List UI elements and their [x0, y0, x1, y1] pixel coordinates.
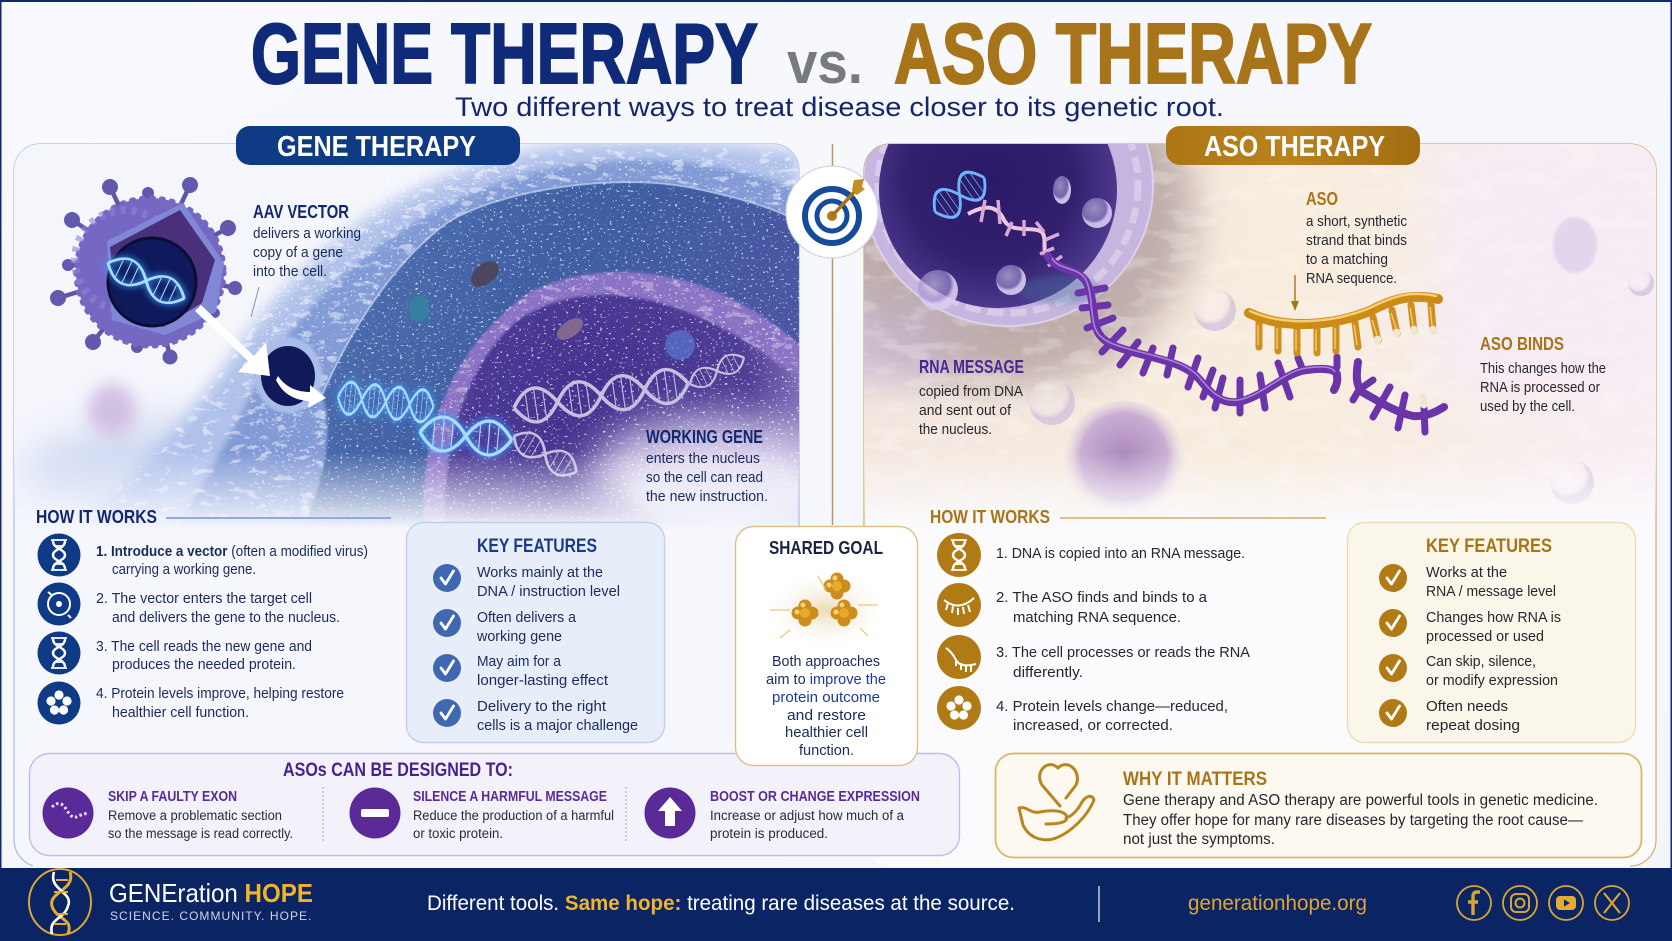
- skip a faulty exon: SKIP A FAULTY EXON: [108, 789, 237, 805]
- boost or change expression: protein is produced.: [710, 826, 828, 841]
- step 2: matching RNA sequence.: [1013, 610, 1181, 626]
- social icons: [1457, 886, 1629, 920]
- label: AAV vector: into the cell.: [253, 264, 327, 280]
- key features: gene: DNA / instruction level: [477, 584, 620, 600]
- key features: gene: May aim for a: [477, 654, 562, 670]
- step 4: healthier cell function.: [112, 705, 249, 721]
- step 3: 3. The cell reads the new gene and: [96, 639, 312, 655]
- step 1: [937, 533, 1245, 577]
- panel: ASOs can be designed to: [30, 754, 960, 856]
- silence a harmful message: Reduce the production of a harmful: [413, 808, 614, 823]
- key features: ASO: repeat dosing: [1426, 718, 1520, 734]
- skip a faulty exon: Remove a problematic section: [108, 808, 282, 823]
- boost or change expression: BOOST OR CHANGE EXPRESSION: [710, 789, 920, 805]
- brand name: GENEration HOPE: [109, 878, 313, 908]
- key features: ASO: RNA / message level: [1426, 584, 1556, 600]
- icon: target: [786, 166, 878, 258]
- label: AAV vector: AAV VECTOR: [253, 202, 349, 222]
- shared goal: healthier cell: [785, 725, 868, 741]
- heading pill: gene therapy: GENE THERAPY: [277, 131, 476, 163]
- step 2: [38, 582, 340, 626]
- why it matters: They offer hope for many rare diseases by targeting the root cause—: [1123, 812, 1583, 829]
- label: working gene: so the cell can read: [646, 470, 763, 486]
- DNA in nucleus: [932, 170, 986, 219]
- label: ASO: a short, synthetic: [1306, 214, 1407, 230]
- key features: gene: working gene: [476, 629, 562, 645]
- label: RNA message: copied from DNA: [919, 384, 1023, 400]
- title: GENE THERAPY: [251, 7, 758, 102]
- key features: ASO: KEY FEATURES: [1426, 536, 1552, 557]
- label: ASO binds: RNA is processed or: [1480, 380, 1600, 396]
- key features: gene: [406, 522, 664, 742]
- step 2: and delivers the gene to the nucleus.: [112, 610, 340, 626]
- silence a harmful message: [350, 788, 614, 841]
- step 2: [937, 583, 1208, 627]
- key features: gene: Works mainly at the: [477, 565, 603, 581]
- label: ASO: ASO: [1306, 189, 1338, 209]
- title: [251, 7, 1372, 102]
- step 2: 2. The ASO finds and binds to a: [996, 590, 1208, 606]
- heading pill: gene therapy: [236, 126, 520, 165]
- step 1: 1. Introduce a vector (often a modified virus): [96, 544, 368, 560]
- shared goal: [736, 526, 918, 766]
- why it matters: WHY IT MATTERS: [1123, 769, 1267, 790]
- step 3: produces the needed protein.: [112, 657, 296, 673]
- gene therapy illustration: [14, 141, 840, 540]
- skip a faulty exon: [42, 788, 293, 841]
- why it matters: [996, 754, 1642, 858]
- website: generationhope.org: [1188, 892, 1367, 915]
- icon: heart in hand: [1019, 765, 1094, 840]
- panel: ASOs can be designed to: ASOs CAN BE DESIGNED TO:: [283, 760, 513, 781]
- label: ASO binds: ASO BINDS: [1480, 334, 1564, 354]
- panel: gene therapy: [14, 141, 840, 866]
- thin pointer: [251, 287, 259, 317]
- label: ASO: to a matching: [1306, 252, 1388, 268]
- step 1: 1. DNA is copied into an RNA message.: [996, 546, 1245, 562]
- label: ASO binds: This changes how the: [1480, 361, 1606, 377]
- how it works: gene: HOW IT WORKS: [36, 507, 157, 527]
- cell entry hole: [254, 337, 322, 413]
- DNA strands: [336, 349, 748, 482]
- label: RNA message: [919, 357, 1024, 438]
- title: ASO THERAPY: [894, 7, 1372, 102]
- key features: gene: Delivery to the right: [477, 699, 606, 715]
- step 3: [937, 635, 1250, 681]
- shared goal: and restore: [787, 708, 866, 724]
- step 4: 4. Protein levels improve, helping restore: [96, 686, 344, 702]
- subtitle: Two different ways to treat disease closer to its genetic root.: [455, 92, 1224, 122]
- label: ASO: strand that binds: [1306, 233, 1407, 249]
- why it matters: Gene therapy and ASO therapy are powerful tools in genetic medicine.: [1123, 792, 1598, 809]
- skip a faulty exon: so the message is read correctly.: [108, 826, 293, 841]
- why it matters: not just the symptoms.: [1123, 831, 1275, 848]
- how it works: gene: [36, 507, 391, 724]
- nucleus: [864, 144, 1154, 327]
- boost or change expression: [644, 788, 920, 841]
- ASO illustration: [864, 144, 1656, 524]
- boost or change expression: Increase or adjust how much of a: [710, 808, 904, 823]
- label: RNA message: RNA MESSAGE: [919, 357, 1024, 377]
- center divider: [832, 144, 834, 525]
- label: ASO binds: used by the cell.: [1480, 399, 1575, 415]
- logo: [29, 869, 91, 935]
- shared goal: aim to improve the: [766, 672, 886, 688]
- label: AAV vector: delivers a working: [253, 226, 361, 242]
- shared goal: SHARED GOAL: [769, 538, 883, 558]
- heading pill: ASO therapy: ASO THERAPY: [1204, 131, 1385, 163]
- key features: ASO: Can skip, silence,: [1426, 654, 1536, 670]
- step 3: 3. The cell processes or reads the RNA: [996, 645, 1250, 661]
- panel: ASO therapy: [863, 143, 1657, 867]
- arrow: into the cell: [195, 305, 326, 408]
- label: ASO: [1306, 189, 1407, 287]
- RNA strand: [968, 200, 1444, 432]
- label: ASO: RNA sequence.: [1306, 271, 1397, 287]
- label: ASO binds: [1480, 334, 1606, 415]
- label: working gene: WORKING GENE: [646, 427, 763, 447]
- key features: ASO: Often needs: [1426, 699, 1508, 715]
- step 4: increased, or corrected.: [1013, 718, 1173, 734]
- step 2: 2. The vector enters the target cell: [96, 591, 312, 607]
- label: RNA message: and sent out of: [919, 403, 1012, 419]
- step 3: differently.: [1013, 665, 1083, 681]
- organelles: [88, 256, 695, 436]
- label: working gene: the new instruction.: [646, 489, 768, 505]
- icon: AAV virus: [50, 177, 242, 364]
- heading pill: ASO therapy: [1166, 126, 1420, 165]
- shared goal: function.: [799, 743, 854, 759]
- footer message: Different tools. Same hope: treating rare diseases at the source.: [427, 892, 1015, 915]
- key features: ASO: processed or used: [1426, 629, 1544, 645]
- label: RNA message: the nucleus.: [919, 422, 992, 438]
- tagline: SCIENCE. COMMUNITY. HOPE.: [110, 909, 313, 923]
- bubbles: [1029, 217, 1654, 525]
- label: working gene: enters the nucleus: [646, 451, 760, 467]
- step 4: 4. Protein levels change—reduced,: [996, 699, 1228, 715]
- silence a harmful message: or toxic protein.: [413, 826, 503, 841]
- key features: gene: KEY FEATURES: [477, 536, 597, 557]
- key features: ASO: or modify expression: [1426, 673, 1558, 689]
- shared goal: protein outcome: [772, 690, 880, 706]
- label: working gene: [646, 427, 768, 505]
- ASO strand: [1249, 294, 1438, 353]
- silence a harmful message: SILENCE A HARMFUL MESSAGE: [413, 789, 607, 805]
- footer: [0, 868, 1672, 941]
- step 3: [38, 632, 312, 674]
- arrow: ASO pointer: [1291, 275, 1299, 311]
- how it works: ASO: [930, 507, 1326, 734]
- step 1: carrying a working gene.: [112, 562, 256, 578]
- step 4: [937, 686, 1228, 734]
- key features: ASO: Works at the: [1426, 565, 1507, 581]
- title: vs.: [787, 31, 863, 96]
- key features: ASO: [1348, 522, 1636, 742]
- icon: proteins: [760, 568, 892, 652]
- step 1: [38, 534, 368, 578]
- how it works: ASO: HOW IT WORKS: [930, 507, 1050, 527]
- label: AAV vector: [253, 202, 361, 280]
- key features: ASO: Changes how RNA is: [1426, 610, 1561, 626]
- key features: gene: longer-lasting effect: [477, 673, 608, 689]
- label: AAV vector: copy of a gene: [253, 245, 343, 261]
- step 4: [38, 682, 344, 724]
- key features: gene: cells is a major challenge: [477, 718, 638, 734]
- shared goal: Both approaches: [772, 654, 880, 670]
- key features: gene: Often delivers a: [477, 610, 577, 626]
